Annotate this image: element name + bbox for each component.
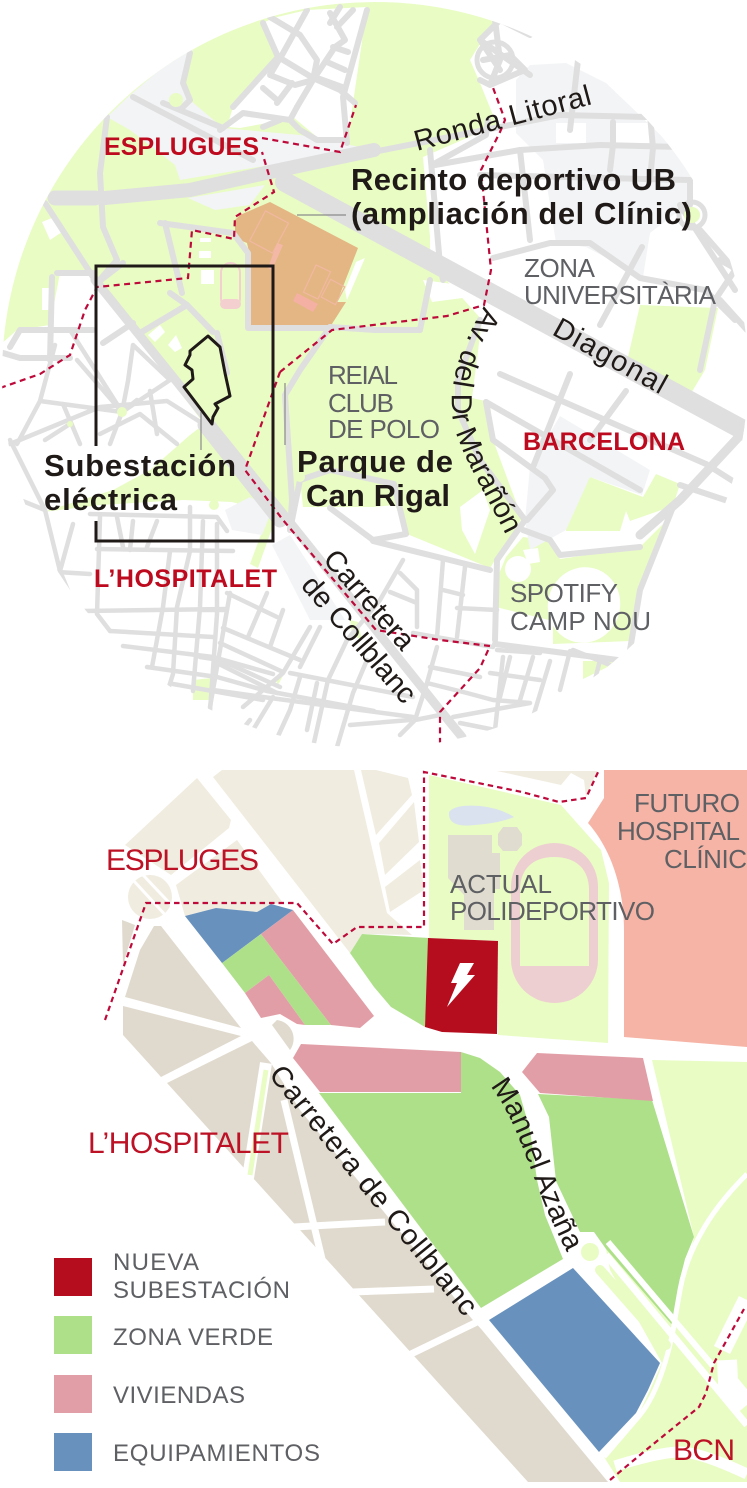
heading: recinto deportivo: Recinto deportivo UB (351, 162, 676, 197)
leader lines (201, 215, 346, 450)
street label: Ronda Litoral: Ronda Litoral (411, 80, 595, 158)
place labels: CLUB (328, 388, 394, 418)
sports zone (429, 775, 609, 1043)
street label: Manuel Azaña: Manuel Azaña (492, 1076, 578, 1252)
legend (54, 1249, 320, 1471)
track (221, 263, 240, 308)
equipamientos parcels (185, 904, 660, 1452)
heading: Parque de Can Rigal: Parque de (297, 444, 453, 479)
light green parkland (604, 1060, 747, 1482)
viviendas parcels (245, 910, 653, 1101)
plan labels: HOSPITAL (617, 816, 740, 846)
locator frame (96, 266, 273, 541)
boundary dotted lines (105, 770, 744, 1480)
municipality labels in plan: ESPLUGES (106, 844, 259, 877)
legend: equipamientos: EQUIPAMIENTOS (113, 1440, 320, 1467)
plan labels: CLÍNIC (664, 844, 747, 874)
running track (511, 843, 598, 1003)
heading: subestación eléctrica: eléctrica (44, 482, 178, 517)
legend: viviendas (54, 1375, 245, 1413)
place labels: DE POLO (328, 414, 440, 444)
polideportivo building (448, 835, 500, 930)
legend: nueva subestación: NUEVA (113, 1249, 199, 1276)
plan labels: POLIDEPORTIVO (450, 896, 655, 926)
streets (3, 7, 747, 747)
plan labels: FUTURO (634, 788, 740, 818)
legend: nueva subestación: SUBESTACIÓN (113, 1277, 290, 1304)
street label: de Collblanc: de Collblanc (295, 570, 423, 710)
plan labels: ACTUAL (450, 869, 552, 899)
futuro hospital (588, 770, 747, 1047)
white side streets (248, 1063, 479, 1355)
municipality labels: ESPLUGUES (104, 133, 259, 161)
upper neighbouring blocks (125, 770, 597, 953)
place labels: SPOTIFY (510, 578, 618, 608)
street label: Diagonal: Diagonal (548, 312, 672, 401)
legend: nueva subestación (54, 1249, 290, 1304)
street label: Av. del Dr Marañón: Av. del Dr Marañón (452, 306, 518, 534)
municipality labels in plan: L’HOSPITALET (88, 1127, 289, 1160)
substation outline (184, 336, 230, 424)
legend: zona verde: ZONA VERDE (113, 1324, 273, 1351)
orange area: recinto deportivo (235, 202, 365, 328)
substation with lightning icon (425, 938, 498, 1034)
heading: recinto deportivo: (ampliación del Clínic) (351, 196, 692, 231)
small roundabout (581, 1243, 599, 1261)
lower tan blocks (122, 920, 608, 1482)
place labels: CAMP NOU (510, 606, 651, 636)
boundary dotted line (0, 85, 505, 745)
street label: Carretera de Collblanc in plan: Carretera de Collblanc (263, 1059, 484, 1322)
lake (449, 806, 514, 826)
legend: zona verde (54, 1316, 273, 1354)
panel: detailed plan (88, 770, 747, 1482)
heading: Parque de Can Rigal: Can Rigal (306, 478, 450, 513)
place labels: REIAL (328, 360, 398, 390)
place labels: UNIVERSITÀRIA (524, 280, 717, 310)
heading: subestación eléctrica: Subestación (44, 448, 236, 483)
panel: locator circular map (2, 2, 746, 746)
octagon building (498, 827, 522, 851)
municipality labels: L’HOSPITALET (94, 565, 277, 593)
legend: equipamientos (54, 1433, 320, 1471)
municipality labels in plan: BCN (673, 1434, 735, 1467)
street label: Carretera: Carretera (317, 544, 421, 657)
municipality labels: BARCELONA (523, 428, 685, 456)
place labels: ZONA (524, 253, 596, 283)
legend: viviendas: VIVIENDAS (113, 1382, 245, 1409)
green parks (222, 934, 694, 1326)
parkland white roads (604, 1174, 747, 1474)
